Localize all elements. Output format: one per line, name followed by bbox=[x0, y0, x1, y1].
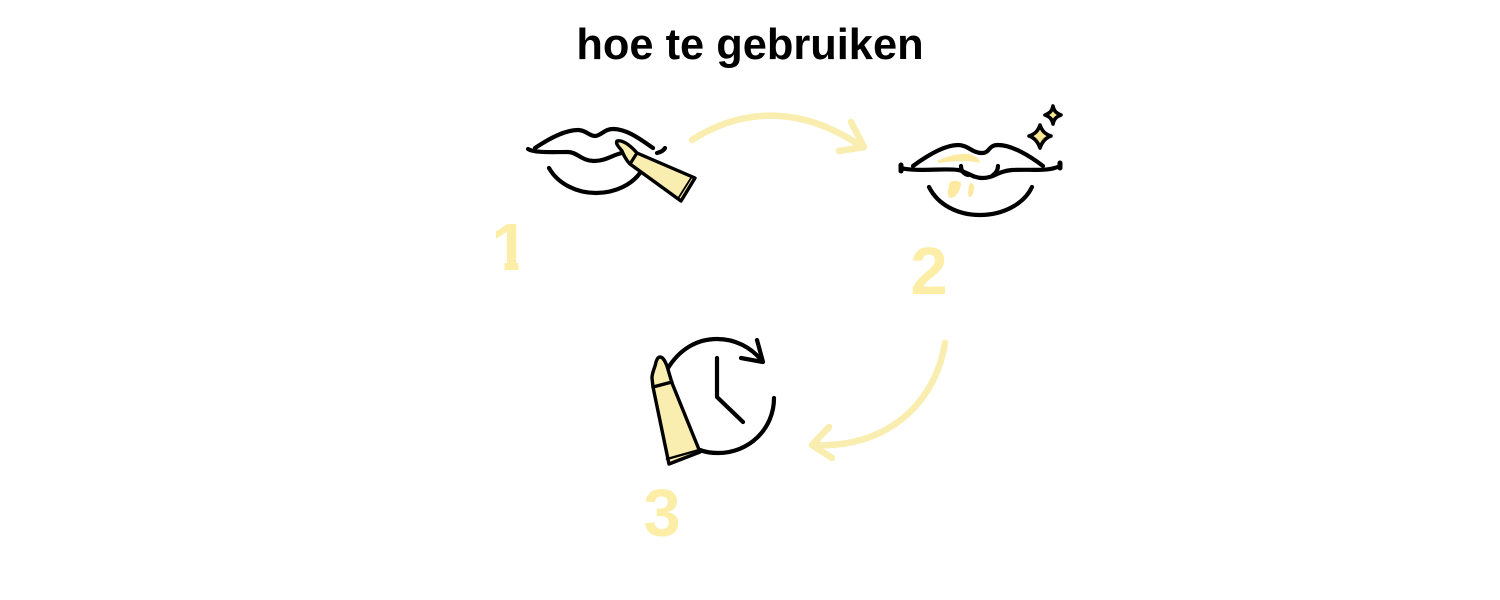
step 1 number: 1 bbox=[491, 210, 529, 285]
pencil bbox=[652, 357, 700, 464]
lip outlines bbox=[901, 145, 1060, 215]
step 2 number: 2 bbox=[910, 234, 948, 309]
step 3: clock and pencil icon bbox=[652, 339, 774, 464]
lip highlights bbox=[937, 154, 980, 198]
clock bbox=[668, 339, 774, 453]
arrow from step 2 to step 3 bbox=[812, 343, 945, 458]
arrow from step 1 to step 2 bbox=[692, 116, 864, 151]
sparkles bbox=[1029, 106, 1061, 148]
step 2: glossy lips with sparkles icon bbox=[901, 106, 1061, 215]
step 3 number: 3 bbox=[643, 476, 681, 551]
title: hoe te gebruiken bbox=[576, 21, 924, 69]
step 1: lips with pencil icon bbox=[528, 129, 695, 201]
